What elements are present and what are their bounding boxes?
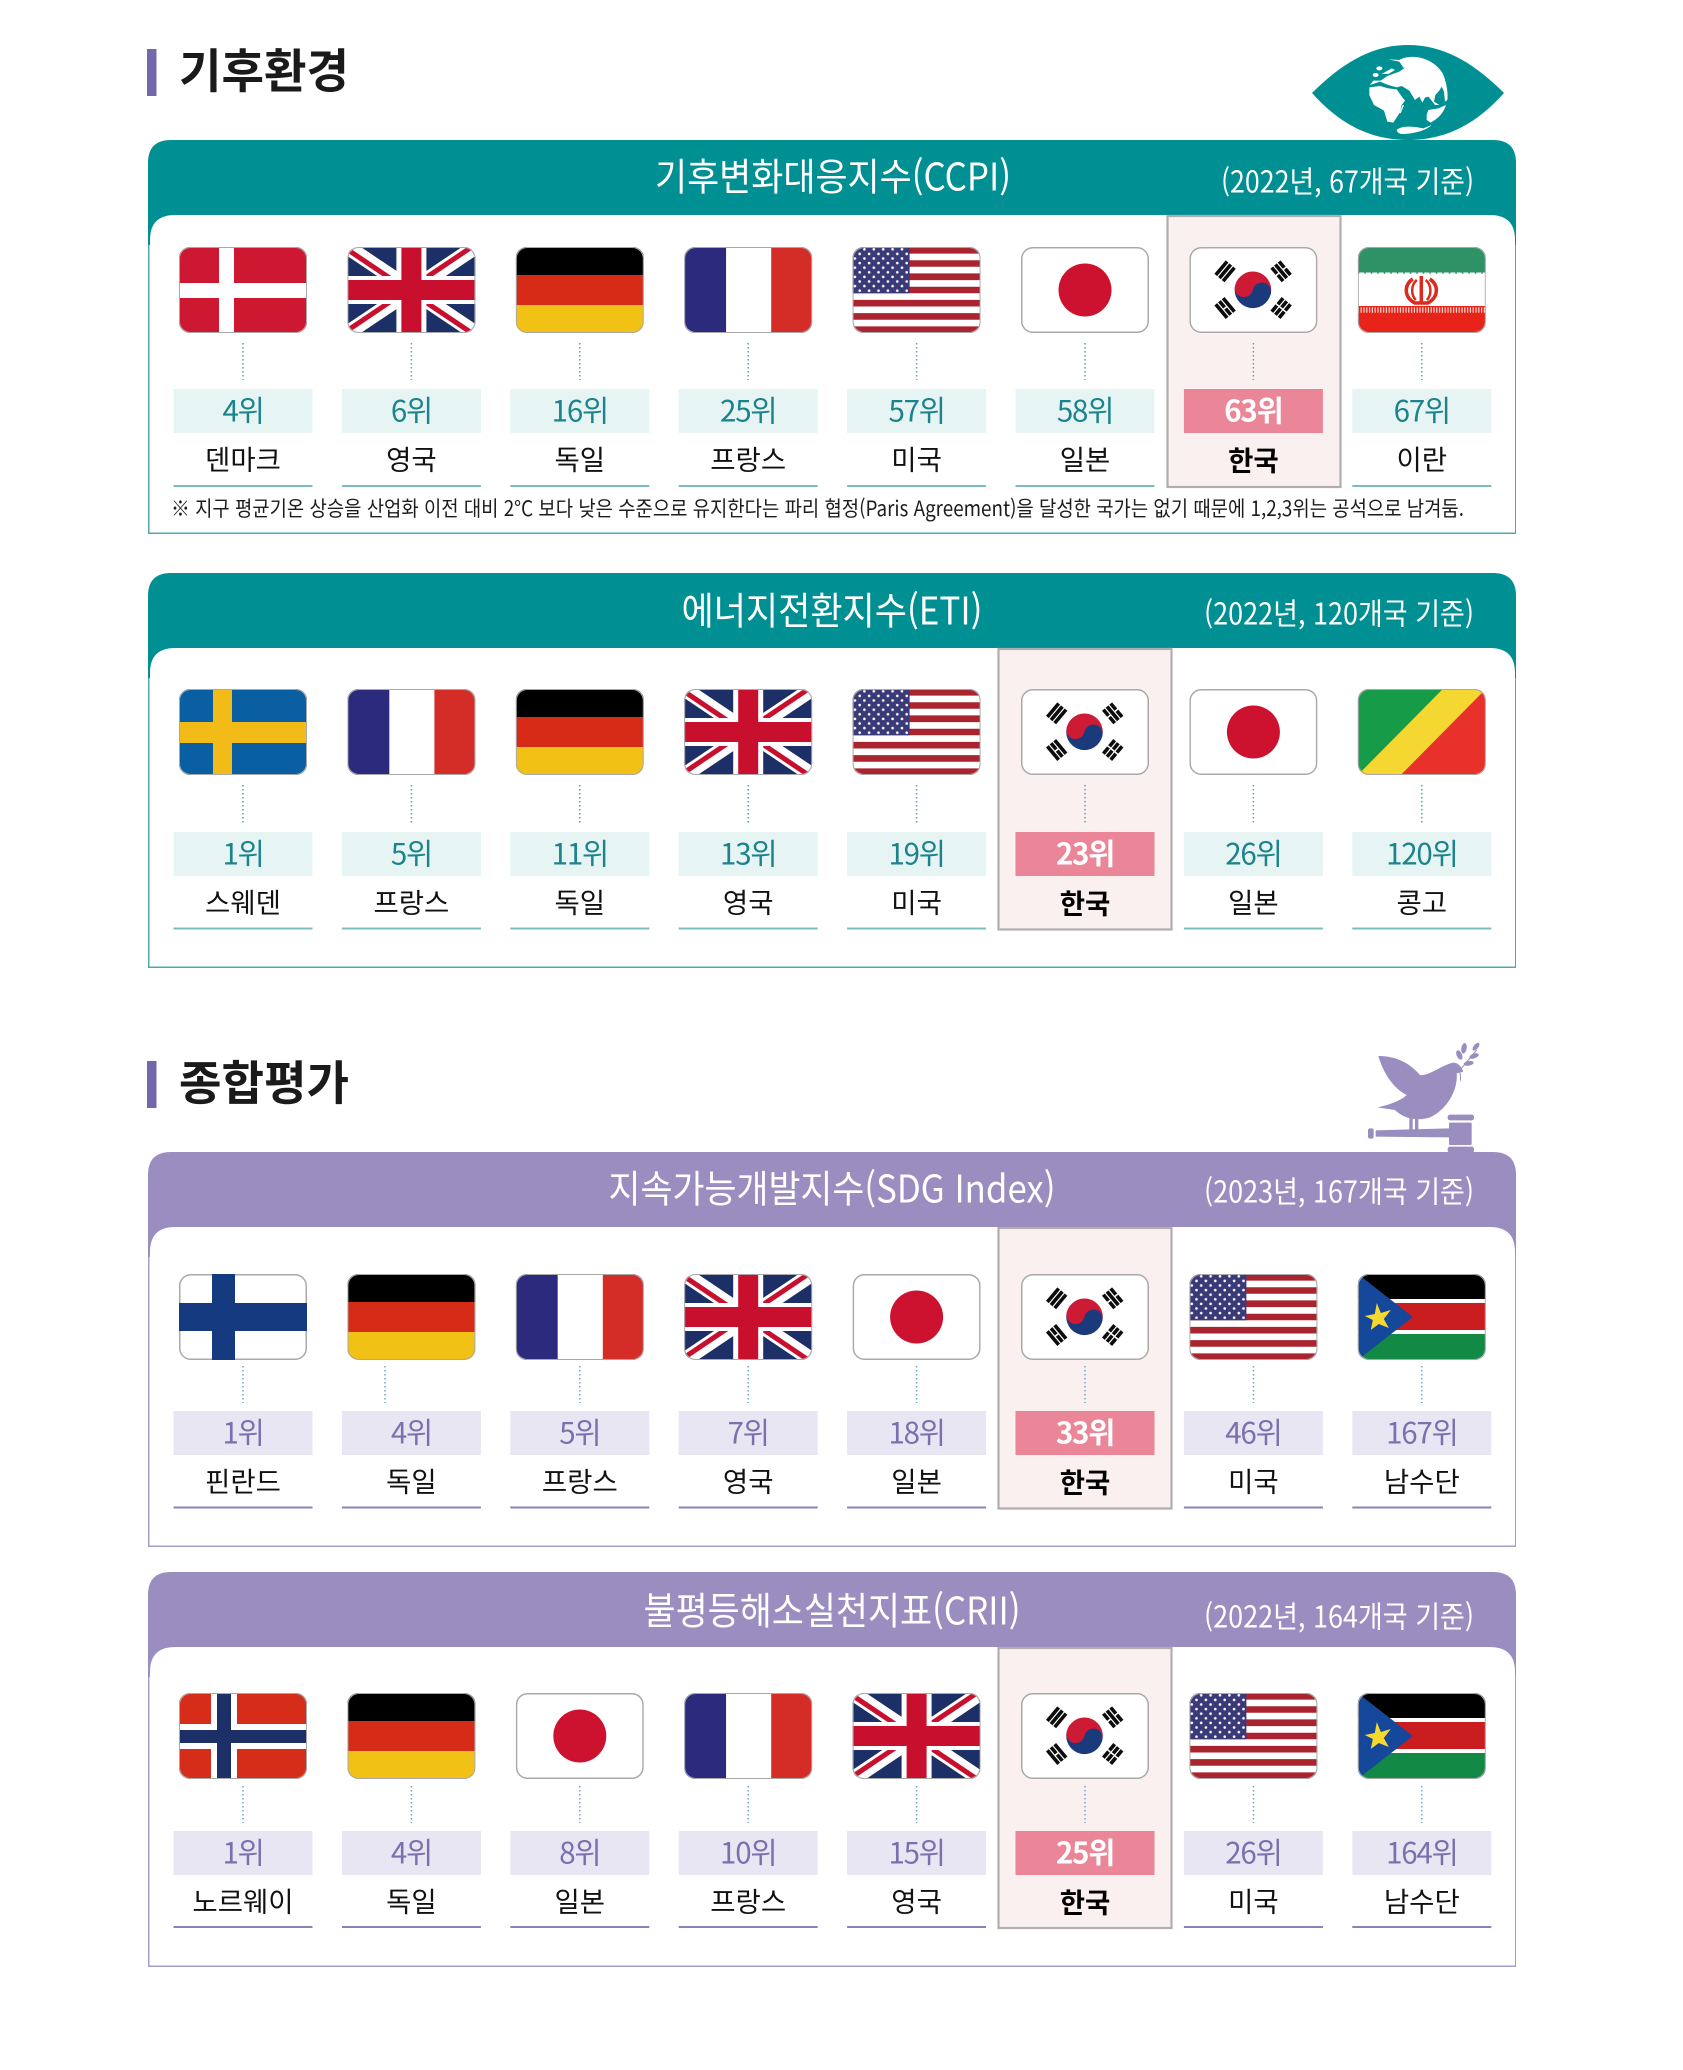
column: France	[510, 1274, 649, 1508]
column: Korea: 한국	[1060, 1460, 1110, 1500]
panel: SDG Index	[148, 1152, 1516, 1546]
column: France	[679, 247, 818, 486]
column: United Kingdom	[679, 1272, 818, 1508]
highlight: Korea column	[1168, 216, 1340, 487]
panel: CRII commitment to reducing inequality index	[148, 1572, 1516, 1966]
column: United Kingdom	[679, 686, 818, 928]
panel subtitle: (2022년, 164개국 기준)	[1204, 1592, 1474, 1636]
column: Finland: 핀란드	[205, 1460, 281, 1500]
column: France: 5위	[391, 832, 432, 874]
column: France	[342, 689, 481, 928]
column: Germany: 4위	[391, 1410, 432, 1452]
column: Congo	[1352, 689, 1491, 928]
column: Denmark	[174, 247, 312, 486]
icon: eye with globe	[1312, 45, 1504, 140]
column: United Kingdom: 영국	[891, 1880, 942, 1920]
column: United Kingdom: 6위	[391, 388, 432, 430]
column: Finland	[174, 1274, 312, 1508]
footnote: ※ 지구 평균기온 상승을 산업화 이전 대비 2°C 보다 낮은 수준으로 유지한다는 파리 협정(Paris Agreement)을 달성한 국가는 없기 때문에 1,2,3위는 공석으로 남겨둠.	[171, 493, 1464, 523]
column: Japan	[1016, 248, 1154, 486]
column: Germany: 독일	[554, 438, 605, 478]
column: Japan: 일본	[891, 1460, 942, 1500]
column: United States: 57위	[888, 388, 945, 430]
column: United States: 46위	[1225, 1410, 1282, 1452]
column: Denmark: 4위	[222, 388, 264, 430]
column: Denmark: 덴마크	[205, 438, 281, 478]
column: United States: 26위	[1225, 1830, 1282, 1872]
panel title: 기후변화대응지수(CCPI)	[655, 146, 1011, 202]
column: Germany: 독일	[554, 880, 605, 920]
column: South Sudan: 남수단	[1384, 1460, 1460, 1500]
column: United Kingdom: 영국	[723, 1460, 774, 1500]
panel: CCPI climate change performance index	[148, 140, 1516, 533]
column: South Sudan	[1352, 1693, 1491, 1927]
column: United States: 19위	[888, 832, 945, 874]
column: United Kingdom: 영국	[386, 438, 437, 478]
column: Congo: 120위	[1386, 832, 1458, 874]
column: Japan: 일본	[1060, 438, 1110, 478]
column: United Kingdom	[847, 1690, 986, 1927]
column: Iran	[1352, 247, 1491, 486]
column: Korea: 25위	[1056, 1830, 1114, 1872]
column: France: 프랑스	[710, 438, 786, 478]
column: United States	[847, 247, 986, 486]
column: Japan: 26위	[1225, 832, 1282, 874]
panel frame	[148, 1572, 1516, 1966]
section heading: overall evaluation: 종합평가	[179, 1045, 349, 1114]
column: Japan: 8위	[559, 1830, 600, 1872]
panel title: 불평등해소실천지표(CRII)	[644, 1580, 1020, 1636]
column: Korea	[1016, 1275, 1154, 1500]
column: United Kingdom: 13위	[720, 832, 776, 874]
column: South Sudan: 164위	[1386, 1830, 1458, 1872]
column: Japan	[510, 1694, 649, 1927]
panel frame	[148, 140, 1516, 533]
column: Norway: 노르웨이	[192, 1880, 294, 1920]
column: Korea	[1016, 690, 1154, 922]
column: United States: 미국	[891, 880, 942, 920]
column: France: 프랑스	[710, 1880, 786, 1920]
column: Finland: 1위	[222, 1410, 264, 1452]
column: Japan: 58위	[1057, 388, 1113, 430]
column: Sweden: 스웨덴	[205, 880, 281, 920]
column: United States	[1184, 1693, 1323, 1927]
column: France: 프랑스	[542, 1460, 618, 1500]
column: Korea: 한국	[1228, 438, 1279, 478]
column: France: 프랑스	[373, 880, 449, 920]
column: France: 25위	[720, 388, 776, 430]
column: Korea	[1016, 1694, 1154, 1920]
column: Germany: 16위	[552, 388, 608, 430]
column: Japan	[1184, 690, 1323, 928]
column: United Kingdom: 15위	[888, 1830, 945, 1872]
column: United States	[1184, 1274, 1323, 1508]
column: Korea: 63위	[1224, 388, 1283, 430]
column: Norway	[174, 1693, 312, 1927]
column: Germany	[510, 689, 649, 928]
column: Japan: 일본	[554, 1880, 605, 1920]
highlight: Korea column	[998, 649, 1172, 930]
column: United Kingdom: 7위	[728, 1410, 769, 1452]
column: Iran: 이란	[1396, 438, 1447, 478]
section heading: climate environment: 기후환경	[179, 33, 349, 102]
panel frame	[148, 573, 1516, 967]
column: Japan: 일본	[1228, 880, 1279, 920]
column: France	[679, 1693, 818, 1927]
panel title: 에너지전환지수(ETI)	[682, 580, 982, 636]
column: Germany: 4위	[391, 1830, 432, 1872]
column: Germany	[510, 247, 649, 486]
column: Congo: 콩고	[1396, 880, 1447, 920]
highlight: Korea column	[998, 1648, 1172, 1928]
column: France: 10위	[720, 1830, 776, 1872]
panel subtitle: (2022년, 120개국 기준)	[1204, 590, 1474, 634]
highlight: Korea column	[998, 1228, 1172, 1508]
column: Germany: 11위	[552, 832, 608, 874]
column: South Sudan: 167위	[1386, 1410, 1458, 1452]
column: Germany	[342, 1693, 481, 1927]
column: Japan: 18위	[888, 1410, 945, 1452]
panel subtitle: (2022년, 67개국 기준)	[1221, 158, 1474, 202]
column: France: 5위	[559, 1410, 600, 1452]
column: Japan	[847, 1275, 986, 1508]
column: United States: 미국	[891, 438, 942, 478]
column: Korea: 한국	[1060, 1880, 1110, 1920]
column: United States: 미국	[1228, 1460, 1279, 1500]
column: Korea: 23위	[1056, 832, 1114, 874]
column: Korea: 한국	[1060, 882, 1110, 922]
column: United States	[847, 689, 986, 928]
column: Sweden	[174, 689, 312, 928]
icon: dove on gavel	[1368, 1042, 1481, 1153]
panel title: 지속가능개발지수(SDG Index)	[608, 1158, 1056, 1214]
column: South Sudan	[1352, 1274, 1491, 1508]
column: Sweden: 1위	[222, 832, 264, 874]
column: South Sudan: 남수단	[1384, 1880, 1460, 1920]
column: Korea: 33위	[1056, 1410, 1114, 1452]
column: Germany: 독일	[386, 1460, 437, 1500]
panel frame	[148, 1152, 1516, 1546]
panel subtitle: (2023년, 167개국 기준)	[1204, 1168, 1474, 1212]
column: United States: 미국	[1228, 1880, 1279, 1920]
column: Iran: 67위	[1394, 388, 1450, 430]
panel: ETI energy transition index	[148, 573, 1516, 967]
column: Korea	[1184, 248, 1323, 478]
column: Norway: 1위	[222, 1830, 264, 1872]
column: United Kingdom: 영국	[723, 880, 774, 920]
column: Germany	[342, 1274, 481, 1508]
column: Germany: 독일	[386, 1880, 437, 1920]
column: United Kingdom	[342, 244, 481, 486]
